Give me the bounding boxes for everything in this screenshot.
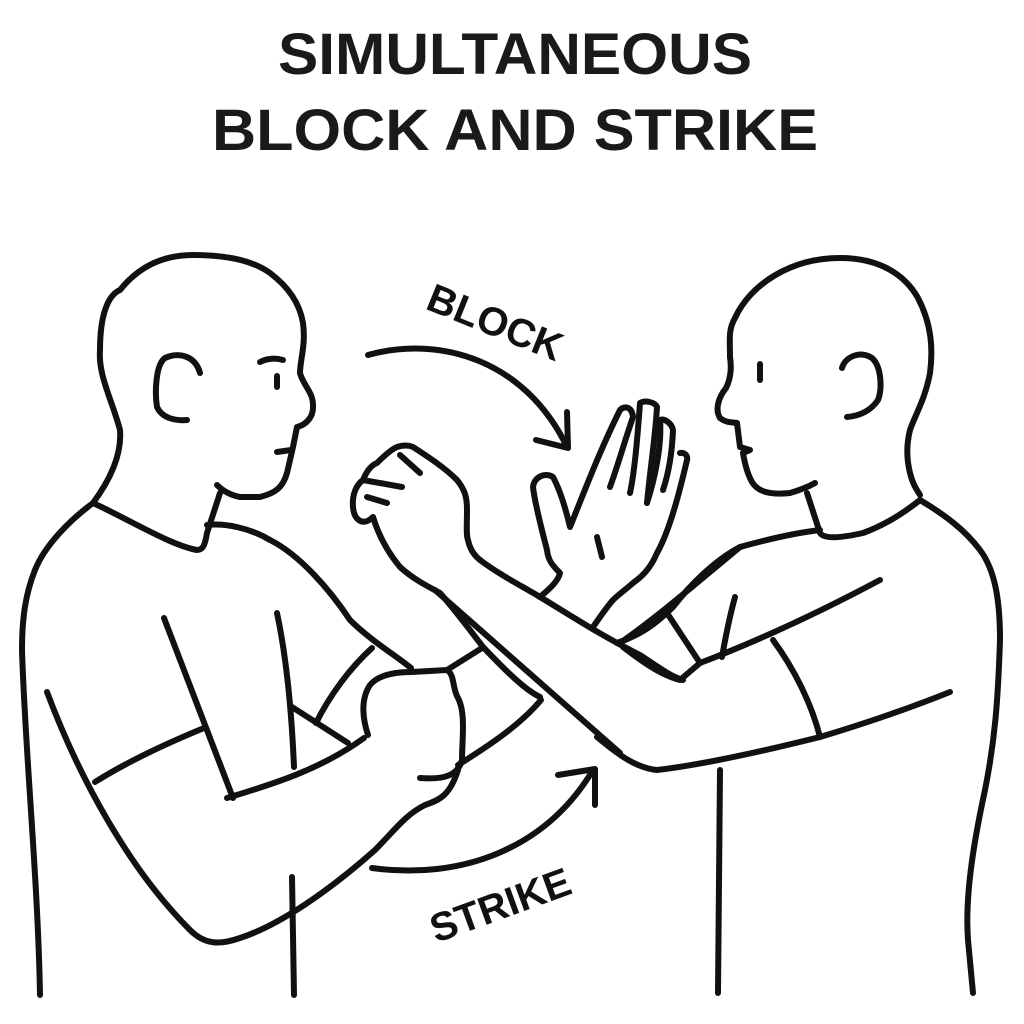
title <box>212 22 818 163</box>
arrow: strike <box>372 769 595 871</box>
crossing forearm <box>435 590 620 753</box>
arm from fist <box>480 560 683 680</box>
head <box>730 258 931 495</box>
fist <box>363 670 463 778</box>
arrow: block <box>368 349 568 448</box>
figure: right person <box>353 258 1000 993</box>
neck and body <box>22 493 220 995</box>
label: block: BLOCK <box>421 276 569 370</box>
head <box>93 255 313 503</box>
label: strike: STRIKE <box>424 860 577 952</box>
title: SIMULTANEOUS <box>278 22 752 87</box>
figure: left person <box>22 255 620 995</box>
title: BLOCK AND STRIKE <box>212 98 818 163</box>
neck and body <box>807 493 1000 993</box>
raised fist <box>353 446 480 560</box>
open palm <box>533 407 633 597</box>
